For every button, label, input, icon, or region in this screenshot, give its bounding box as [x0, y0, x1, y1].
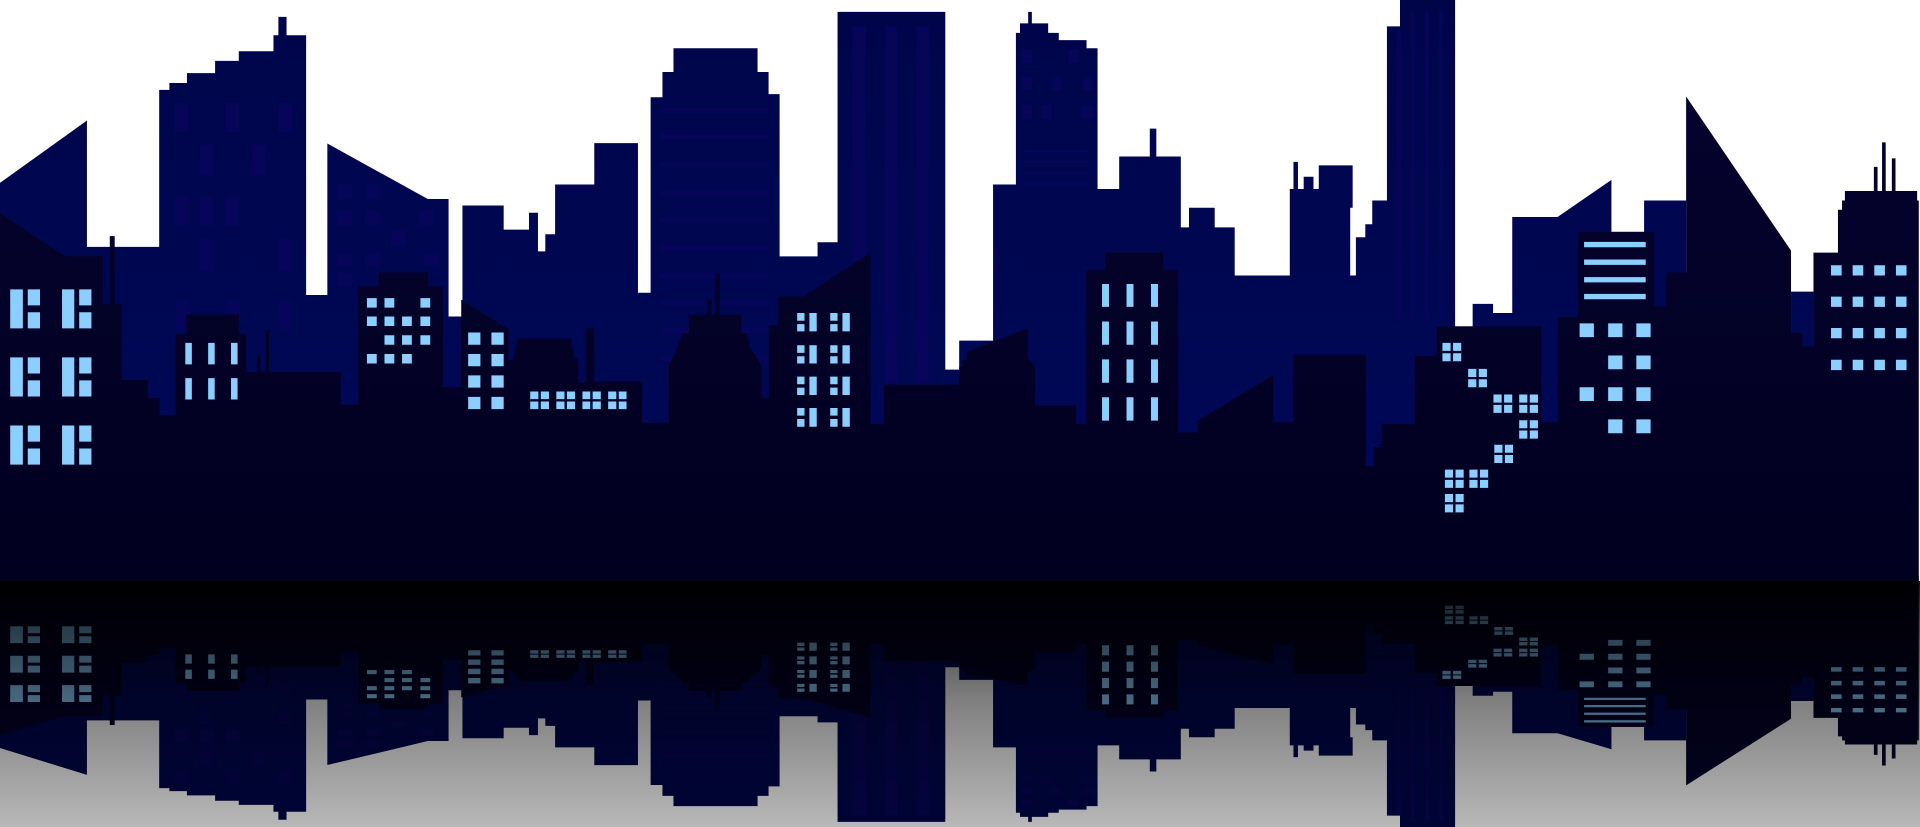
skyline scene [0, 0, 1919, 581]
windows: narrow vertical panes building [185, 343, 238, 400]
windows: square grid building [367, 298, 430, 364]
lit windows [10, 242, 1907, 512]
faint windows on back buildings [174, 11, 1443, 383]
window cross bars [530, 343, 1538, 512]
windows: far-left building [10, 289, 91, 465]
windows: far-right building [1831, 265, 1907, 370]
windows: staggered four-pane building [1442, 343, 1538, 512]
windows: mid building mixed panes [797, 313, 850, 427]
water darkening gradient [0, 581, 1920, 827]
windows: striped top and square panes building [1580, 242, 1651, 433]
reflection of the skyline in the water [0, 576, 1919, 827]
windows: tall centre building [1102, 284, 1158, 421]
windows: two-column building [468, 333, 504, 409]
windows: low building four-pane row [530, 391, 627, 409]
front row of buildings silhouette [0, 96, 1919, 581]
back row of buildings silhouette [0, 0, 1813, 581]
